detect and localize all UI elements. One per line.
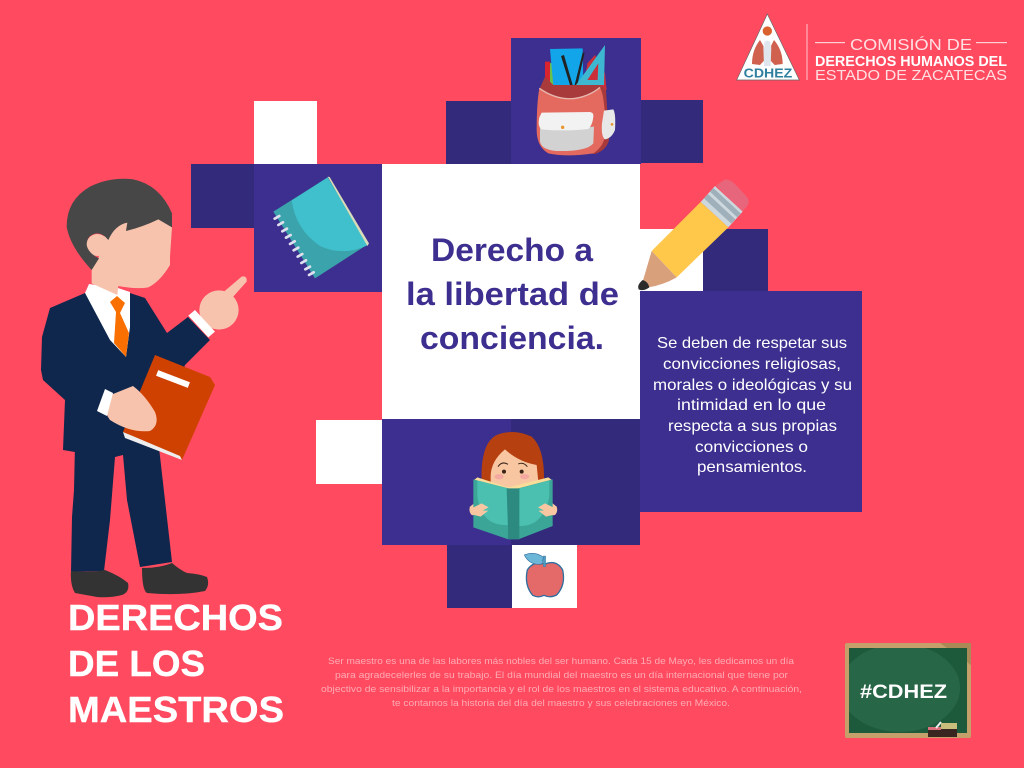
panel: description text: pensamientos. [697, 459, 807, 476]
panel: description text: Se deben de respetar sus [657, 335, 847, 352]
heading: derechos de los maestros: MAESTROS [68, 689, 284, 730]
teacher pointing hand [188, 276, 247, 337]
icon: chalkboard with hashtag [840, 643, 971, 738]
logo: CDHEZ [737, 14, 1007, 84]
teacher shirt [85, 284, 130, 357]
teacher hand on book [105, 386, 157, 431]
text block: introduction: te contamos la historia del día del maestro y sus celebraciones en México. [392, 698, 730, 709]
icon: chalkboard with hashtag: #CDHEZ [860, 682, 947, 703]
logo: CDHEZ: DERECHOS HUMANOS DEL [815, 54, 1007, 70]
text block: introduction: objectivo de sensibilizar a la importancia y el rol de los maestros en el sistema educativo. A continuación, [321, 684, 802, 695]
logo: CDHEZ: COMISIÓN DE [850, 35, 972, 54]
panel: description text: morales o ideológicas y su [653, 377, 852, 394]
teacher shoes [71, 563, 208, 597]
heading: derechos de los maestros: DE LOS [68, 643, 205, 684]
teacher legs [71, 430, 172, 572]
icon: girl reading a book [469, 432, 557, 539]
teacher jacket [41, 293, 210, 455]
panel: description text: intimidad en lo que [677, 397, 826, 414]
panel: description text: convicciones o [695, 439, 808, 456]
icon: backpack [537, 45, 615, 155]
teacher tie [110, 296, 129, 357]
text block: introduction: Ser maestro es una de las labores más nobles del ser humano. Cada 15 de Mayo, les dedicamos un día [328, 656, 795, 667]
logo triangle: CDHEZ [744, 66, 793, 80]
panel: description text: convicciones religiosas, [663, 356, 841, 373]
teacher ear [86, 234, 108, 256]
panel: description text: respecta a sus propias [668, 418, 837, 435]
teacher face and neck [92, 210, 172, 295]
icon: pencil [638, 179, 749, 290]
panel: central title [382, 164, 640, 419]
text block: introduction [321, 656, 802, 709]
heading: derechos de los maestros [68, 597, 284, 730]
teacher head [67, 179, 172, 295]
panel: central title: la libertad de [406, 276, 619, 312]
panel: description text [640, 291, 862, 512]
teacher hair [67, 179, 172, 270]
mosaic of coloured squares [191, 38, 768, 608]
icon: notebook [273, 177, 369, 278]
icon: apple [524, 553, 564, 597]
teacher left cuff [97, 389, 113, 416]
text block: introduction: para agradecelerles de su trabajo. El día mundial del maestro es un día internacional que tiene por [335, 670, 788, 681]
red book [123, 355, 215, 460]
logo triangle [737, 14, 799, 80]
heading: derechos de los maestros: DERECHOS [68, 597, 283, 638]
panel: central title: conciencia. [420, 320, 604, 356]
logo: CDHEZ: ESTADO DE ZACATECAS [815, 68, 1007, 84]
illustration: teacher [41, 179, 247, 597]
panel: central title: Derecho a [431, 232, 593, 268]
